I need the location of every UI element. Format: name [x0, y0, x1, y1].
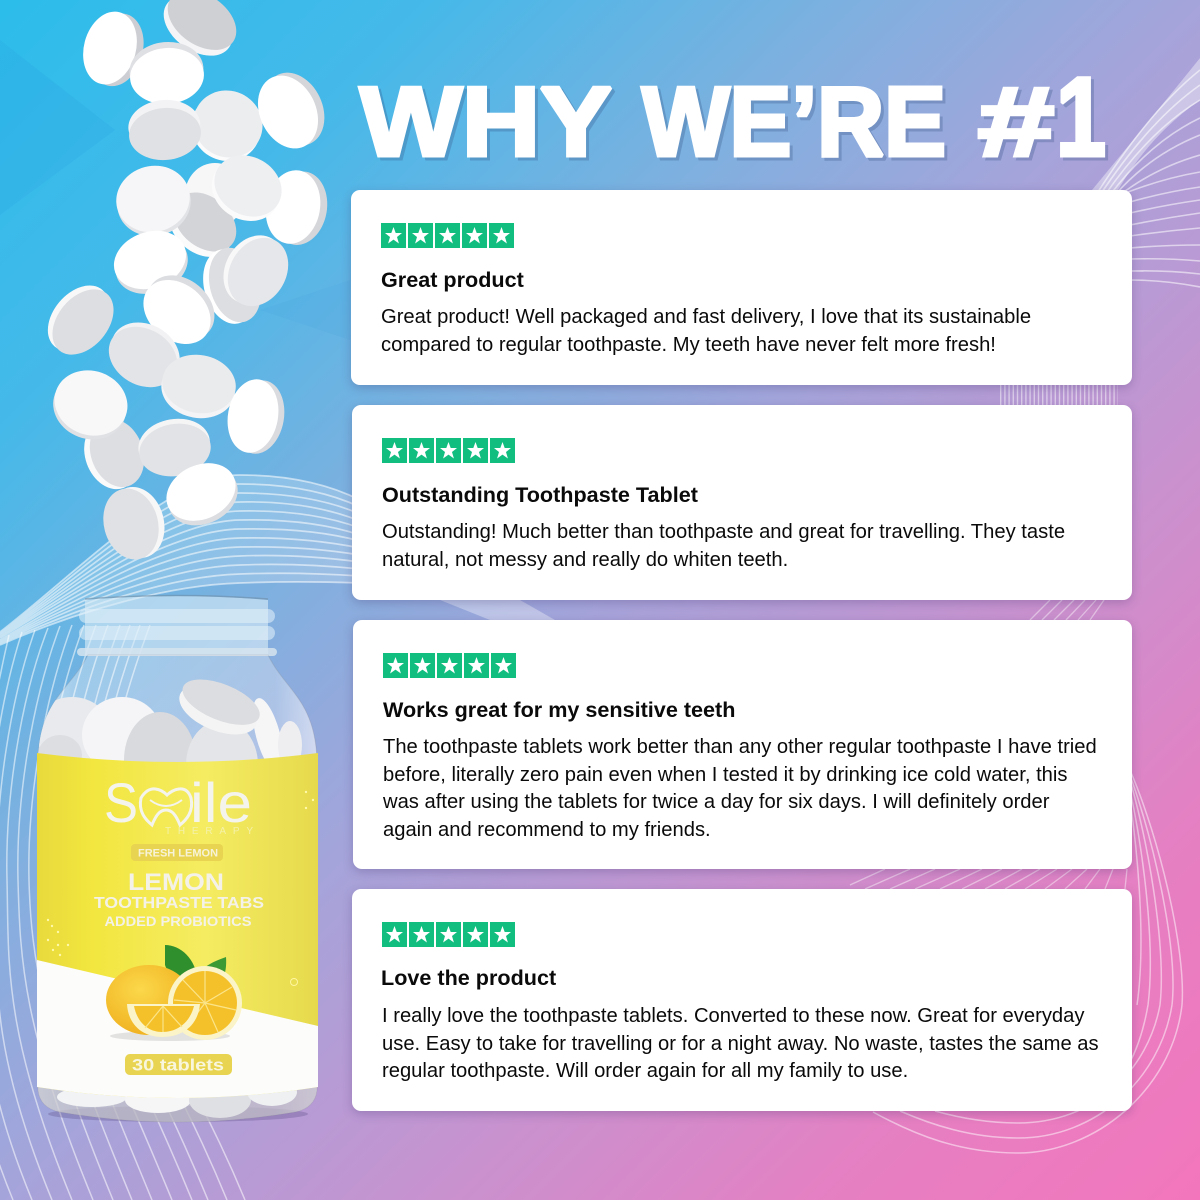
- tablet count badge: [125, 1054, 232, 1075]
- jar body: [38, 655, 317, 1122]
- review text: Outstanding! Much better than toothpaste and great for travelling. They taste: [382, 521, 1065, 543]
- jar shadow: [48, 1106, 308, 1122]
- tablet: [98, 310, 191, 399]
- review text: again and recommend to my friends.: [383, 819, 711, 841]
- tablet: [211, 224, 300, 317]
- tablet: [106, 221, 196, 304]
- review text: compared to regular toothpaste. My teeth have never felt more fresh!: [381, 334, 996, 356]
- product jar: [37, 594, 318, 1122]
- review text: was after using the tablets for twice a day for six days. I will definitely order: [383, 791, 1049, 813]
- tablets inside jar: [34, 670, 318, 1125]
- review heading: Works great for my sensitive teeth: [383, 697, 735, 722]
- tablet: [201, 143, 293, 233]
- review heading: Great product: [381, 267, 524, 292]
- brand logo: [104, 771, 253, 837]
- brand logo: ile: [190, 771, 252, 834]
- tablet: [157, 349, 240, 424]
- falling toothpaste tablets: [48, 0, 328, 560]
- title: #: [978, 66, 1054, 176]
- product name: TOOTHPASTE TABS: [94, 895, 264, 912]
- review text: before, literally zero pain even when I tested it by drinking ice cold water, this: [383, 764, 1068, 786]
- review text: [382, 521, 1065, 571]
- star rating: [382, 438, 515, 463]
- label dots: [47, 791, 314, 956]
- tablet: [35, 274, 126, 366]
- review text: regular toothpaste. Will order again for all my family to use.: [382, 1060, 908, 1082]
- tablet: [127, 39, 206, 107]
- tablet: [195, 242, 269, 330]
- tablet: [96, 481, 172, 566]
- product name: LEMON: [128, 869, 224, 896]
- review card 1: [351, 190, 1132, 385]
- review text: The toothpaste tablets work better than any other regular toothpaste I have tried: [383, 736, 1097, 758]
- lemon illustration: [106, 945, 242, 1041]
- title: WHY: [360, 66, 612, 176]
- tablet: [153, 0, 247, 68]
- review card 3: [353, 620, 1132, 869]
- flavour tag: FRESH LEMON: [138, 848, 218, 860]
- review text: [383, 736, 1097, 841]
- product name: ADDED PROBIOTICS: [104, 913, 252, 929]
- jar label: [37, 745, 318, 1115]
- tablet: [75, 6, 151, 92]
- product name: [94, 869, 264, 929]
- tablet: [109, 158, 198, 244]
- brand logo: THERAPY: [165, 826, 253, 837]
- tablet: [131, 262, 227, 357]
- review card 2: [352, 405, 1132, 600]
- tablet: [185, 163, 245, 227]
- review text: [381, 306, 1031, 356]
- review heading: Love the product: [381, 965, 556, 990]
- review card 4: [352, 889, 1132, 1111]
- review text: Great product! Well packaged and fast delivery, I love that its sustainable: [381, 306, 1031, 328]
- review heading: Outstanding Toothpaste Tablet: [382, 482, 698, 507]
- tablet: [44, 360, 137, 449]
- title: 1: [1056, 54, 1106, 180]
- title: WE’RE: [642, 66, 946, 176]
- jar neck and threads: [77, 596, 277, 656]
- review text: [382, 1005, 1099, 1082]
- tablet: [75, 411, 153, 497]
- brand logo: S: [104, 771, 138, 834]
- title: [357, 54, 1108, 180]
- flavour tag: [131, 844, 223, 861]
- review text: natural, not messy and really do whiten teeth.: [382, 549, 788, 571]
- star rating: [382, 922, 515, 947]
- tablet: [158, 180, 248, 269]
- tablet: [126, 97, 203, 163]
- tablet: [179, 78, 275, 174]
- tablet: [134, 413, 215, 482]
- star rating: [383, 653, 516, 678]
- review text: use. Easy to take for travelling or for a night away. No waste, tastes the same as: [382, 1033, 1099, 1055]
- tablet: [260, 166, 333, 249]
- tablet count badge: 30 tablets: [132, 1056, 224, 1074]
- star rating: [381, 223, 514, 248]
- tablet: [157, 452, 247, 536]
- tablet: [247, 63, 336, 158]
- review text: I really love the toothpaste tablets. Converted to these now. Great for everyday: [382, 1005, 1084, 1027]
- tablet: [222, 375, 290, 458]
